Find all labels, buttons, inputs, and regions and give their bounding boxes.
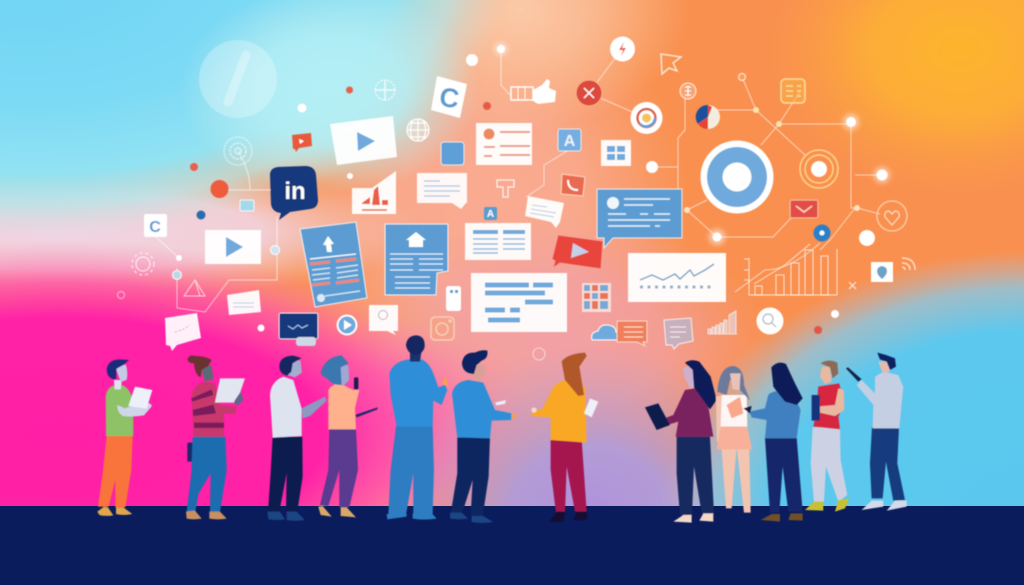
icon: heart circle (877, 201, 907, 231)
icon: drop card (871, 262, 893, 282)
icon: bubble with face (369, 305, 398, 335)
icon: red X circle (576, 80, 602, 106)
icon: A tile (558, 129, 581, 151)
icon: red tile (561, 174, 585, 196)
icon: music circle (533, 348, 545, 360)
icon: small bars (708, 311, 737, 334)
card: profile text (476, 123, 532, 165)
icon: letter C card (431, 76, 467, 118)
chart: big target circle (700, 140, 774, 214)
panel: blue page with house (385, 224, 448, 295)
icon: red video bubble large (552, 235, 603, 269)
icon: magnifier (756, 308, 784, 334)
icon: small X (849, 282, 856, 289)
person 3 (267, 356, 327, 521)
person 12 (846, 353, 907, 511)
icon: ring logo (630, 102, 662, 134)
icon: phone (446, 286, 461, 311)
chart: outlined bar chart (744, 244, 837, 295)
icon: cursor arrow (661, 54, 681, 74)
icon: play circle (338, 316, 356, 334)
icon: translucent circle with wrench (199, 40, 277, 118)
card: bar chart (352, 171, 396, 214)
icon: speech bubble outline chart (165, 313, 201, 351)
icon: globe small (407, 119, 429, 141)
icon: envelope (790, 200, 818, 218)
icon: bolt circle (610, 36, 635, 62)
icon: small tile (240, 200, 254, 211)
icon: cloud (592, 325, 620, 340)
person 5 (387, 335, 449, 520)
icon: dark folder (279, 313, 318, 346)
icon: grid card (601, 140, 631, 166)
person 11 (805, 361, 849, 512)
icon: LinkedIn bubble: in (284, 178, 306, 205)
icon: wifi arcs (902, 258, 915, 270)
icon: pie chart (696, 105, 720, 129)
icon: gold target (800, 150, 838, 188)
icon: gear flower (132, 253, 154, 275)
icon: A tile: A (564, 133, 576, 150)
icon: grid tile (582, 283, 611, 312)
icon: instagram (431, 317, 454, 340)
card: small receipt (227, 290, 261, 315)
icon: mountain outline (184, 280, 205, 296)
icon: small node (172, 270, 182, 280)
icon: small C card: C (149, 219, 161, 236)
icon: globe (375, 80, 395, 100)
person 8 (645, 360, 717, 523)
decorative dots (176, 43, 875, 334)
icon: outlined note bubble (664, 318, 693, 349)
person 7 (531, 353, 598, 522)
chart: line chart card (628, 253, 726, 302)
group: people (97, 335, 907, 523)
icon: thumbs up (511, 79, 556, 104)
card: white note bubble (525, 196, 564, 228)
card: chat bubble (417, 173, 467, 209)
person 4 (318, 355, 378, 517)
person 2 (186, 355, 245, 519)
icon: blue square (441, 142, 464, 165)
icon: gold rounded document (781, 79, 805, 103)
icon: small ring (738, 74, 746, 80)
panel: large text card (471, 273, 567, 332)
card: text list (465, 223, 531, 260)
icon: red node (210, 180, 228, 198)
icon: A tile small: A (487, 209, 494, 220)
connector lines (156, 49, 881, 312)
floor (0, 506, 1024, 585)
person 10 (743, 363, 803, 522)
panel: blue resume document (300, 222, 367, 307)
icon: blue dot (814, 224, 830, 242)
icon: letter C card: C (438, 82, 461, 114)
card: video left (205, 230, 261, 264)
icon: video card top (330, 116, 397, 165)
person 1 (97, 359, 152, 516)
person 9 (716, 366, 752, 513)
illustration layer (97, 36, 915, 523)
panel: blue chat bubble (597, 189, 682, 248)
icon: spiral circle (224, 137, 252, 165)
icon: orange chat bubble (617, 321, 647, 346)
icon: small C card (144, 214, 167, 237)
icon: flower small (118, 292, 124, 298)
person 6 (450, 350, 517, 523)
icon: red video bubble (292, 133, 312, 152)
connector nodes (646, 107, 890, 245)
icon: small circle node (270, 246, 280, 254)
icon: A tile small (484, 207, 497, 220)
icon: letter T (497, 180, 514, 197)
icon: E circle (680, 83, 696, 99)
icon: LinkedIn bubble (270, 166, 318, 220)
